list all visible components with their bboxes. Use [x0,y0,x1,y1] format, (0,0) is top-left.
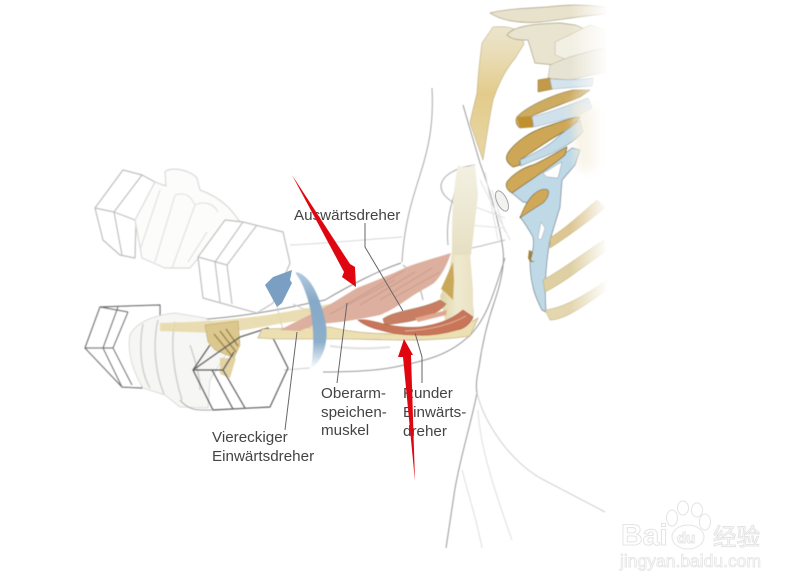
arrow: red arrow to Auswärtsdreher [292,175,356,287]
watermark: Baidu jingyan: du [677,530,695,547]
label: Oberarmspeichenmuskel: muskel [321,422,369,439]
bone: sternum and lower cartilage [512,148,580,312]
bone: second rib [516,90,590,128]
muscle: Oberarmspeichenmuskel [280,253,451,331]
arrow: blue rotation arrow [265,270,327,369]
label: Oberarmspeichenmuskel: Oberarm- [321,385,386,402]
collarbone marker: small oval [493,189,511,213]
watermark: Baidu jingyan: 经验 [713,524,760,550]
bone: third rib [506,117,580,167]
watermark: Baidu jingyan [619,501,761,571]
bone: clavicle [490,5,605,23]
icon: faded right dumbbell weight [198,220,290,313]
arrow: red arrow to Runder Einwärtsdreher [398,339,415,481]
bone: first rib [538,78,553,92]
body outline: torso and arm contours [193,88,605,548]
leader lines [285,223,422,430]
bone: fourth rib [506,147,567,193]
bone: radius and ulna [258,318,478,340]
icon: faded left dumbbell weight [95,170,155,258]
label: Runder Einwärtsdreher: Runder [403,385,453,402]
forearm bones through hand [160,304,330,378]
bone: lower ribs [550,200,605,248]
label: Viereckiger Einwärtsdreher: Einwärtsdreher [212,448,314,465]
forearm and elbow anatomy [258,164,478,340]
watermark: Baidu jingyan: jingyan.baidu.com [619,551,761,571]
bone: humerus head and shaft [470,27,524,160]
bone: fifth rib [520,189,549,218]
lower dumbbell weight at back [85,305,160,388]
label: Oberarmspeichenmuskel: speichen- [321,404,387,421]
front dumbbell weight [193,328,288,410]
label: Viereckiger Einwärtsdreher: Viereckiger [212,429,288,446]
ribcage and shoulder skeleton [470,5,607,320]
bone: lower humerus [440,250,474,327]
label: Auswärtsdreher: Auswärtsdreher [294,207,400,224]
bone: upper humerus, faded [452,164,478,255]
watermark: Baidu jingyan: Bai [621,519,668,552]
upper dumbbell: faded start position [95,169,290,313]
label: Runder Einwärtsdreher: dreher [403,423,447,440]
tint behind ribs [570,100,600,170]
icon: faded fist [135,169,240,268]
fist holding dumbbell [129,313,235,410]
muscle: Auswärtsdreher [383,300,446,325]
bone: scapula and acromion [507,23,600,65]
icon: paw [666,501,710,549]
label: Runder Einwärtsdreher: Einwärts- [403,404,466,421]
muscle: Runder Einwärtsdreher [358,310,473,335]
shoulder fade to white [570,0,608,340]
